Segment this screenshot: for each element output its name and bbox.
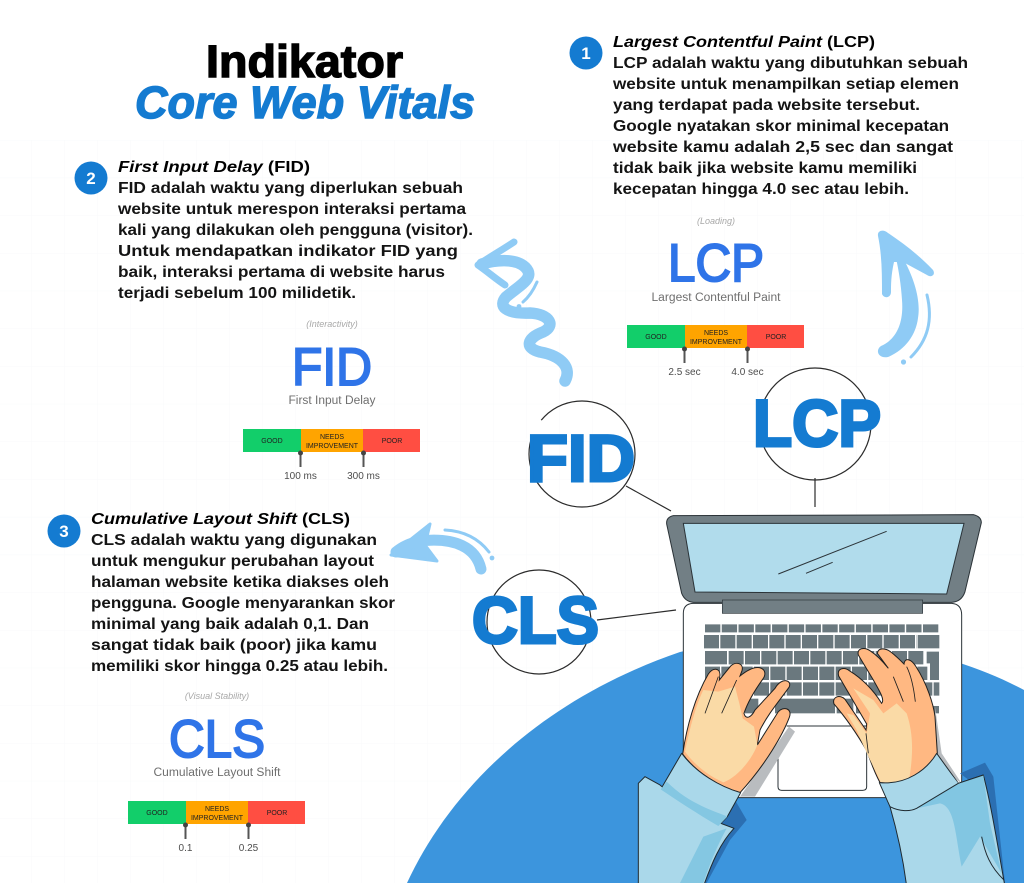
panel: FID metric: First Input Delay [288,395,376,407]
panel: CLS metric: CLS [169,710,265,769]
text block: FID description: website untuk merespon interaksi pertama [117,201,466,218]
text block: FID description [74,159,473,302]
text block: FID description: Untuk mendapatkan indikator FID yang [118,243,458,260]
text block: CLS description: untuk mengukur perubahan layout [91,553,375,570]
callout: LCP circle and label: LCP [753,386,881,460]
right sleeve [879,753,1005,883]
title: Indikator [206,36,403,87]
laptop base [683,603,962,798]
keyboard [704,628,939,713]
badge: number 1 [570,36,602,70]
blue background circle [407,639,1024,883]
threshold bar: FID: 100 ms [284,471,317,482]
threshold bar: CLS: GOOD [146,810,168,817]
text block: CLS description: halaman website ketika diakses oleh [91,574,389,591]
threshold bar: CLS [128,801,305,854]
panel: CLS metric [128,691,305,854]
badge: number 2 [74,162,108,194]
heading: CLS: Cumulative Layout Shift (CLS) [91,511,350,528]
panel: FID metric: (Interactivity) [306,319,358,329]
threshold bar: LCP [627,325,804,378]
right hand [834,649,937,783]
text block: CLS description: minimal yang baik adalah 0,1. Dan [91,616,369,633]
laptop lid [667,515,981,602]
callout: FID circle and label [527,401,671,511]
text block: LCP description: website untuk menampilkan setiap elemen [612,76,959,93]
badge: number 2: 2 [86,169,96,188]
callout: CLS circle and label [472,570,676,674]
illustration: laptop and hands [638,515,1005,883]
laptop hinge [722,600,923,613]
threshold bar: FID [243,429,420,482]
heading: LCP: Largest Contentful Paint (LCP) [613,34,875,51]
text block: LCP description: LCP adalah waktu yang dibutuhkan sebuah [613,55,968,72]
text block: LCP description: kecepatan hingga 4.0 sec atau lebih. [613,181,909,198]
callout: FID circle and label: FID [527,421,635,495]
panel: LCP metric [627,216,804,378]
trackpad [778,726,867,790]
text block: LCP description: tidak baik jika website kamu memiliki [613,160,917,177]
panel: LCP metric: LCP [668,234,764,293]
threshold bar: FID: NEEDS [320,434,344,441]
arrow: to LCP text [878,231,934,365]
callout: CLS circle and label: CLS [472,583,599,657]
left sleeve [638,753,741,883]
threshold bar: CLS: 0.25 [239,843,259,854]
threshold bar: CLS: POOR [267,810,287,817]
threshold bar: LCP: NEEDS [704,330,728,337]
callout: LCP circle and label [753,368,881,507]
panel: LCP metric: (Loading) [697,216,735,226]
text block: CLS description: CLS adalah waktu yang digunakan [91,532,377,549]
threshold bar: LCP: 4.0 sec [731,367,764,378]
panel: LCP metric: Largest Contentful Paint [652,292,781,304]
threshold bar: LCP: 2.5 sec [668,367,701,378]
threshold bar: FID: GOOD [261,438,283,445]
text block: FID description: terjadi sebelum 100 milidetik. [118,285,356,302]
badge: number 1: 1 [581,44,591,63]
left hand [683,663,790,793]
text block: FID description: kali yang dilakukan oleh pengguna (visitor). [118,222,473,239]
threshold bar: LCP: POOR [766,334,786,341]
panel: CLS metric: (Visual Stability) [185,691,249,701]
arrow: to FID text [478,242,567,381]
laptop screen [683,523,964,594]
text block: CLS description: pengguna. Google menyarankan skor [91,595,395,612]
threshold bar: CLS: 0.1 [179,843,193,854]
title: Core Web Vitals [135,77,475,128]
threshold bar: FID: POOR [382,438,402,445]
text block: FID description: FID adalah waktu yang diperlukan sebuah [118,180,463,197]
threshold bar: LCP: GOOD [645,334,667,341]
panel: FID metric: FID [292,338,372,397]
title [135,36,475,128]
text block: LCP description [570,34,968,198]
threshold bar: CLS: IMPROVEMENT [191,815,244,822]
text block: LCP description: Google nyatakan skor minimal kecepatan [613,118,949,135]
threshold bar: LCP: IMPROVEMENT [690,339,743,346]
sleeve shadows [690,763,1005,883]
text block: CLS description: sangat tidak baik (poor) jika kamu [91,637,377,654]
heading: FID: First Input Delay (FID) [118,159,310,176]
text block: FID description: baik, interaksi pertama di website harus [118,264,445,281]
text block: CLS description: memiliki skor hingga 0.25 atau lebih. [91,658,388,675]
badge: number 3 [48,514,80,548]
text block: LCP description: yang terdapat pada website tersebut. [613,97,920,114]
threshold bar: FID: 300 ms [347,471,380,482]
threshold bar: FID: IMPROVEMENT [306,443,359,450]
panel: FID metric [243,319,420,482]
threshold bar: CLS: NEEDS [205,806,229,813]
text block: LCP description: website kamu adalah 2,5 sec dan sangat [612,139,954,156]
panel: CLS metric: Cumulative Layout Shift [154,767,281,779]
text block: CLS description [48,511,395,675]
badge: number 3: 3 [59,522,69,541]
arrow: to CLS text [391,524,494,569]
hand shadows [740,707,962,797]
